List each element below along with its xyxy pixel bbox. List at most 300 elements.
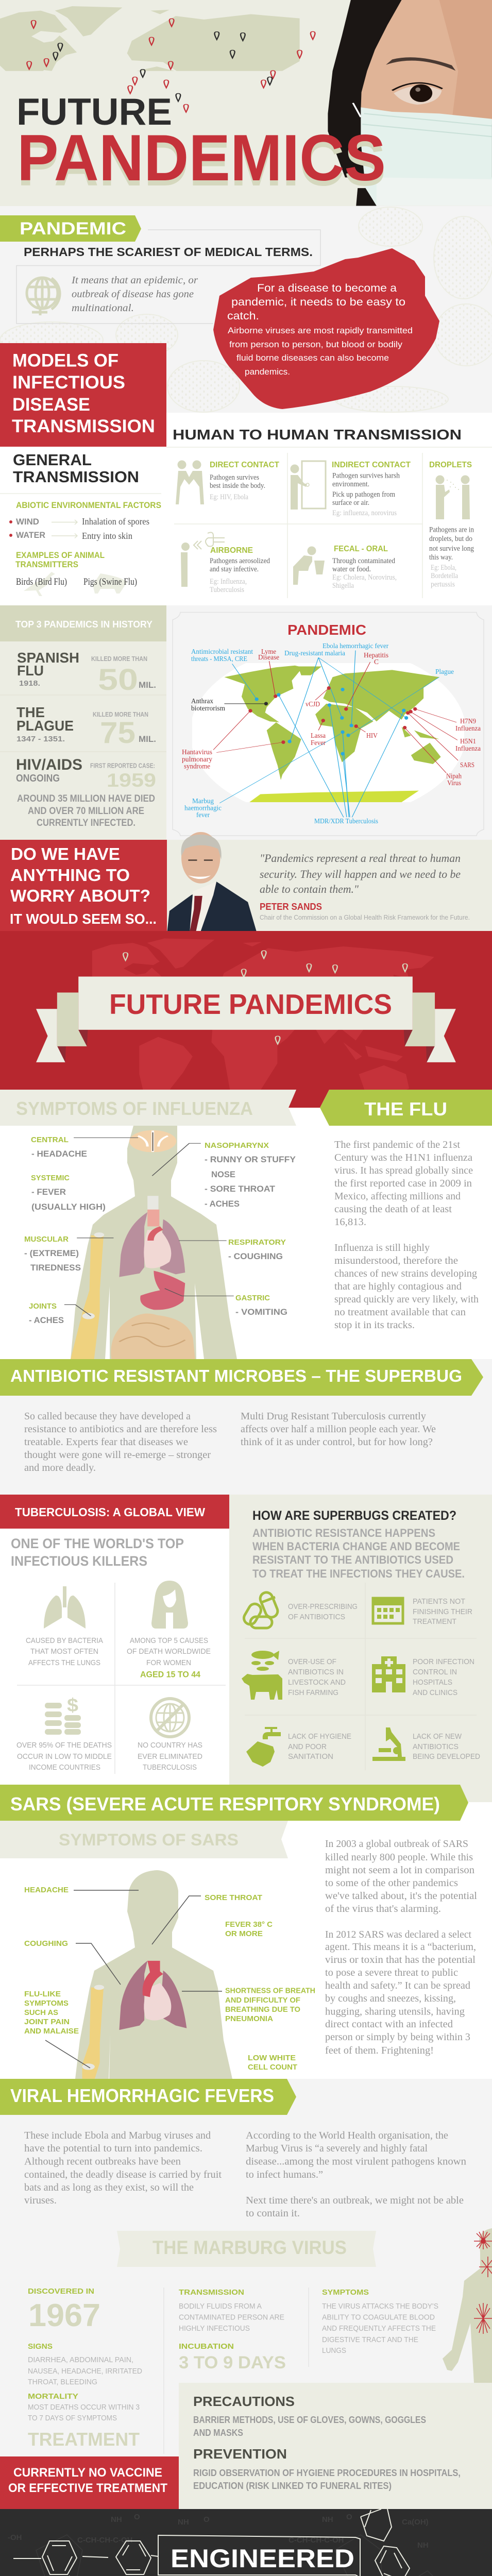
incubation: 3 TO 9 DAYS [179, 2353, 286, 2372]
arm bone [82, 1987, 104, 2079]
indirect contact: Pick up pathogen from [332, 490, 395, 499]
text: sars: person or simply by being within 3 [325, 2031, 470, 2043]
spanish flu: SPANISH [17, 650, 79, 666]
text: left column: and more deadly. [24, 1462, 96, 1473]
faint chemistry background: NH [322, 2515, 333, 2524]
droplets: droplets, but do [429, 535, 472, 543]
precautions and prevention [179, 2383, 492, 2509]
symptom labels: - RUNNY OR STUFFY [205, 1155, 296, 1164]
spanish flu: KILLED MORE THAN [91, 655, 147, 663]
text: the flu: 16,813. [334, 1216, 366, 1228]
signs [28, 2342, 142, 2386]
icon: microscope [372, 1727, 405, 1761]
map labels: blue: haemorrhagic [184, 805, 222, 812]
symptoms: SYMPTOMS [322, 2288, 369, 2297]
text: left column: have the potential to turn into pandemics. [24, 2143, 202, 2154]
precautions and prevention: AND MASKS [193, 2428, 243, 2438]
map labels: red: H5N1 [460, 738, 476, 745]
hiv/aids: FIRST REPORTED CASE: [90, 761, 155, 770]
stat: deaths in low income countries: OVER 95% OF THE DEATHS [16, 1741, 112, 1750]
icon: bird [24, 572, 55, 596]
abiotic environmental factors: WATER [16, 530, 45, 540]
callout: red blob [213, 248, 439, 409]
text: sars: we've talked about, it's the potential [325, 1890, 477, 1902]
callout: red blob: pandemic, it needs to be easy to [231, 296, 405, 308]
symptom labels: HEADACHE [24, 1886, 69, 1894]
text: the flu: no treatment available that can [334, 1307, 466, 1318]
cause: over-prescribing: OF ANTIBIOTICS [288, 1613, 345, 1621]
abiotic environmental factors: Inhalation of spores [82, 516, 149, 527]
text: the flu: causing the death of at least [334, 1204, 452, 1215]
airborne: Eg: Influenza, [210, 578, 247, 586]
map labels: blue: Marbug [192, 798, 214, 805]
indirect contact: INDIRECT CONTACT [332, 461, 411, 469]
symptom labels: NASOPHARYNX [205, 1141, 269, 1150]
text: the flu: spread quickly are very likely, with [334, 1294, 479, 1305]
text: left column: treatable. Experts fear that diseases we [24, 1436, 188, 1448]
symptom labels: TIREDNESS [30, 1263, 81, 1273]
map labels: red: Disease [258, 654, 279, 662]
red world map [92, 939, 434, 1090]
hiv/aids: 1959 [107, 770, 156, 791]
symptom labels: MUSCULAR [24, 1235, 69, 1244]
faint chemistry background: -OH [8, 2533, 22, 2542]
symptom labels: SHORTNESS OF BREATH [225, 1987, 315, 1995]
map labels: red: Nipah [446, 773, 462, 780]
callout: no vaccine: OR EFFECTIVE TREATMENT [8, 2481, 167, 2495]
abiotic environmental factors: ABIOTIC ENVIRONMENTAL FACTORS [16, 500, 161, 510]
droplets [429, 461, 474, 588]
red question block: DO WE HAVE [11, 844, 120, 863]
lungs [119, 1961, 186, 2030]
symptom labels [24, 1136, 296, 1325]
abiotic environmental factors: Entry into skin [82, 531, 132, 541]
precautions and prevention: PRECAUTIONS [193, 2394, 295, 2409]
transmission: HIGHLY INFECTIOUS [179, 2324, 250, 2333]
signs: DIARRHEA, ABDOMINAL PAIN, [28, 2355, 133, 2364]
spanish flu [17, 650, 156, 697]
icon: two people shaking hands [176, 461, 204, 504]
mortality: MORTALITY [28, 2392, 78, 2401]
panel: antibiotic resistant microbes [0, 1359, 492, 1495]
cause: poor infection control: CONTROL IN [413, 1668, 457, 1676]
symptom labels: JOINT PAIN [24, 2018, 70, 2026]
trachea [147, 1196, 159, 1210]
spanish flu: MIL. [139, 680, 156, 690]
connector lines [45, 1890, 222, 2068]
indirect contact: Eg: influenza, norovirus [332, 509, 397, 517]
map labels: red: pulmonary [182, 756, 212, 764]
map labels: red: Influenza [455, 725, 481, 733]
heading: models [0, 343, 166, 447]
symptoms [322, 2288, 438, 2355]
stomach [140, 1271, 185, 1310]
spanish flu: 1918. [19, 679, 40, 688]
panel: the marburg virus [0, 2228, 492, 2509]
incubation: INCUBATION [179, 2342, 234, 2351]
stat: deaths in low income countries: $ [67, 1694, 78, 1716]
droplets: Bordetella [431, 572, 458, 580]
banner: symptoms of influenza: SYMPTOMS OF INFLUENZA [16, 1098, 253, 1119]
panel: pandemic definition [0, 206, 492, 413]
cause: lack of new antibiotics: ANTIBIOTICS [413, 1742, 459, 1751]
text: left column: bats and as long as they exist, so will the [24, 2182, 194, 2193]
banner [0, 1785, 468, 1821]
banner [0, 1359, 483, 1396]
subheading: ONE OF THE WORLD'S TOP [11, 1536, 184, 1551]
map labels: black [191, 698, 225, 713]
heart [144, 1983, 171, 2021]
transmission: BODILY FLUIDS FROM A [179, 2302, 262, 2311]
stat: no country eliminated: EVER ELIMINATED [138, 1752, 202, 1761]
map labels: red: Lassa [311, 732, 326, 740]
title: PANDEMICS [17, 121, 386, 194]
subheading [11, 1536, 184, 1569]
hiv/aids [16, 756, 156, 828]
cause: poor infection control [372, 1656, 474, 1697]
indirect contact: Pathogen survives harsh [332, 472, 400, 480]
faint chemistry background: C-CH-CH-C-OH [77, 2536, 132, 2545]
hiv/aids: AROUND 35 MILLION HAVE DIED [17, 793, 155, 804]
banner: symptoms of influenza [0, 1090, 296, 1126]
cause: poor infection control: HOSPITALS [413, 1678, 452, 1687]
heading: human to human: HUMAN TO HUMAN TRANSMISSION [173, 427, 462, 443]
quote [260, 852, 461, 895]
text: right column: Marbug Virus is “a severely and highly fatal [246, 2143, 428, 2154]
panel: pandemic world map [166, 605, 492, 840]
banner: pandemic: PANDEMIC [20, 219, 126, 239]
airborne: and stay infective. [210, 565, 259, 573]
stat: no country eliminated: TUBERCULOSIS [143, 1763, 197, 1772]
icon: globe [27, 278, 60, 315]
cause: over-prescribing: OVER-PRESCRIBING [288, 1602, 358, 1611]
map labels: red: Hantavirus [182, 749, 212, 756]
discovered: 1967 [28, 2298, 100, 2333]
banner: ANTIBIOTIC RESISTANT MICROBES – THE SUPERBUG [10, 1366, 462, 1385]
cause: lack of new antibiotics: LACK OF NEW [413, 1732, 462, 1741]
header [0, 1495, 229, 1529]
molecule drawing [13, 2509, 410, 2576]
map labels: blue: Drug-resistant malaria [284, 650, 346, 657]
text: sars: to pose a severe threat to public [325, 1967, 458, 1978]
heart [144, 1230, 171, 1268]
cause: over-use in farming: FISH FARMING [288, 1688, 338, 1697]
attribution [260, 902, 470, 921]
abiotic environmental factors [9, 500, 161, 541]
text: right column: affects over half a million people each year. We [241, 1423, 436, 1435]
map labels: red: HIV [366, 732, 378, 740]
map labels: red: Influenza [455, 745, 481, 753]
faint chemistry background: O [346, 2513, 352, 2521]
abiotic environmental factors: WIND [16, 517, 39, 527]
faint chemistry background: O [203, 2515, 210, 2524]
text: right column: Multi Drug Resistant Tuberculosis currently [241, 1411, 426, 1422]
title: PANDEMICS [17, 126, 386, 199]
panel: models of infectious disease transmission [0, 343, 492, 605]
text: sars [325, 1838, 477, 2056]
mortality: MOST DEATHS OCCUR WITHIN 3 [28, 2403, 140, 2412]
mortality: TO 7 DAYS OF SYMPTOMS [28, 2414, 117, 2422]
attribution: Chair of the Commission on a Global Health Risk Framework for the Future. [260, 913, 470, 921]
symptom labels: COUGHING [24, 1939, 68, 1948]
ribbon heading: THE MARBURG VIRUS [152, 2237, 347, 2258]
text: left column [24, 1411, 217, 1473]
heading: models: INFECTIOUS [12, 372, 125, 393]
intro [252, 1527, 465, 1580]
fecal-oral: water or food. [332, 565, 371, 573]
subheading: INFECTIOUS KILLERS [11, 1553, 147, 1569]
hero map pins [27, 19, 315, 112]
fecal-oral: Shigella [332, 582, 354, 590]
faint chemistry background: C-CH-CH-C-OH [289, 2536, 344, 2545]
panel: engineered [0, 2509, 492, 2576]
text: left column [24, 2130, 222, 2206]
panel: viral hemorrhagic fevers [0, 2079, 492, 2509]
photo: Peter Sands [167, 832, 257, 931]
fecal-oral [293, 545, 397, 590]
text: sars: In 2012 SARS was declared a select [325, 1929, 471, 1940]
direct contact: Pathogen survives [210, 473, 259, 482]
heading: models: DISEASE [12, 395, 90, 415]
quote: able to contain them." [260, 883, 359, 895]
text: the flu: Century was the H1N1 influenza [334, 1152, 472, 1163]
symptom labels: SYSTEMIC [31, 1174, 70, 1182]
hiv/aids: HIV/AIDS [16, 756, 82, 773]
symptom labels: CELL COUNT [248, 2063, 297, 2072]
faint chemistry background: Ca(OH) [402, 2518, 429, 2527]
symptom labels: JOINTS [29, 1302, 57, 1311]
banner [0, 2079, 296, 2115]
text: sars: virus or toxin that has the potential [325, 1954, 476, 1965]
panel: how are superbugs created [229, 1495, 492, 1802]
map labels: black: Anthrax [191, 698, 213, 705]
text: right column [241, 1411, 436, 1448]
symptom labels: - ACHES [29, 1315, 64, 1325]
stat: bacteria affects lungs: AFFECTS THE LUNGS [28, 1658, 100, 1667]
text: right column: think of it as under control, but for how long? [241, 1436, 433, 1448]
map labels: red: Lyme [261, 648, 276, 656]
text: left column: So called because they have developed a [24, 1411, 191, 1422]
cause: patients not finishing [373, 1597, 472, 1626]
cause: lack of new antibiotics [372, 1727, 480, 1761]
banner: VIRAL HEMORRHAGIC FEVERS [10, 2085, 274, 2106]
map labels: red: SARS [460, 761, 474, 769]
red question block: WORRY ABOUT? [10, 886, 150, 905]
panel: top 3 pandemics in history [0, 605, 166, 840]
examples of animal transmitters: EXAMPLES OF ANIMAL [16, 550, 105, 560]
title: FUTURE [16, 91, 172, 133]
banner: symptoms of sars [0, 1821, 288, 1858]
symptoms: LUNGS [322, 2346, 346, 2355]
text: left column: contained, the deadly disease is carried by fruit [24, 2169, 222, 2180]
map labels: red: vCJD [306, 701, 320, 708]
callout: red blob: catch. [227, 310, 259, 322]
subtitle: PERHAPS THE SCARIEST OF MEDICAL TERMS. [24, 245, 313, 259]
hiv/aids: AND OVER 70 MILLION ARE [28, 806, 144, 817]
cause: patients not finishing: FINISHING THEIR [413, 1607, 472, 1616]
map labels: red: Fever [311, 739, 326, 747]
text: the flu: the first reported case in 2009 in [334, 1178, 472, 1189]
precautions and prevention: BARRIER METHODS, USE OF GLOVES, GOWNS, GOGGLES [193, 2415, 426, 2425]
cause: lack of hygiene: LACK OF HYGIENE [288, 1732, 351, 1741]
icon: coins [45, 1703, 81, 1735]
examples of animal transmitters: TRANSMITTERS [15, 560, 78, 569]
indirect contact: surface or air. [332, 499, 369, 507]
the plague: PLAGUE [16, 718, 74, 734]
background blobs [0, 207, 492, 412]
header [0, 605, 166, 641]
droplets: not survive long [429, 545, 474, 553]
cause: patients not finishing: PATIENTS NOT [413, 1597, 465, 1606]
panel: tuberculosis global view [0, 1495, 229, 1774]
faint chemistry background: NH [111, 2515, 122, 2524]
mortality [28, 2392, 140, 2422]
symptom labels: FEVER 38° C [225, 1920, 273, 1929]
discovered: DISCOVERED IN [28, 2287, 94, 2296]
cause: over-use in farming [242, 1651, 346, 1700]
callout: red blob: fluid borne diseases can also become [236, 353, 389, 363]
symptom labels: AND MALAISE [24, 2027, 79, 2036]
pins [123, 951, 408, 1044]
callout: red blob: Airborne viruses are most rapidly transmitted [228, 326, 413, 335]
text: sars: agent. This means it is a “bacterium, [325, 1941, 476, 1953]
incubation [179, 2342, 286, 2372]
airborne: AIRBORNE [210, 546, 253, 555]
heading: general transmission: GENERAL [13, 451, 92, 469]
droplets: DROPLETS [429, 461, 472, 469]
text: sars: killed nearly 800 people. While this [325, 1852, 473, 1863]
stat: deaths in low income countries: OCCUR IN LOW TO MIDDLE [17, 1752, 112, 1761]
icon: person at door [291, 461, 326, 510]
red question block [0, 840, 167, 931]
precautions and prevention: PREVENTION [193, 2446, 287, 2462]
cause: over-prescribing [242, 1590, 358, 1628]
body silhouette with lungs [75, 1870, 232, 2079]
text: sars: might not seem a lot in comparison [325, 1865, 474, 1876]
stat: causes of death for women: AGED 15 TO 44 [140, 1669, 201, 1680]
map labels: red: C [374, 658, 379, 666]
transmission: TRANSMISSION [179, 2288, 244, 2297]
text: the flu [334, 1139, 479, 1331]
symptom labels: CENTRAL [31, 1136, 69, 1144]
treatment heading: TREATMENT [28, 2429, 140, 2450]
signs: THROAT, BLEEDING [28, 2378, 97, 2386]
direct contact: best inside the body. [210, 482, 265, 490]
transmission: CONTAMINATED PERSON ARE [179, 2313, 284, 2321]
banner: pandemic [0, 215, 141, 242]
icon: person and cup [293, 546, 325, 585]
heading: models: TRANSMISSION [12, 416, 155, 436]
panel: future pandemics banner [0, 931, 492, 1090]
signs: NAUSEA, HEADACHE, IRRITATED [28, 2367, 142, 2376]
symptom labels: BREATHING DUE TO [225, 2005, 300, 2014]
heading: PANDEMIC [287, 622, 366, 638]
map labels: blue: MDR/XDR Tuberculosis [314, 818, 378, 825]
stat: bacteria affects lungs: CAUSED BY BACTERIA [26, 1636, 103, 1645]
symptom connector lines [64, 1138, 234, 1316]
panel: sars [0, 1785, 477, 2079]
text: sars: In 2003 a global outbreak of SARS [325, 1838, 468, 1850]
map labels: red [182, 648, 481, 787]
text: the flu: stop it in its tracks. [334, 1319, 415, 1331]
hero panel [0, 0, 492, 206]
cause: lack of hygiene [246, 1727, 351, 1767]
arm bone [71, 1235, 104, 1359]
icon: globe with strike [151, 1699, 189, 1737]
symptom labels: RESPIRATORY [228, 1238, 286, 1247]
callout: no vaccine: CURRENTLY NO VACCINE [13, 2466, 162, 2480]
map labels: blue: threats - MRSA, CRE [191, 655, 247, 663]
brain [129, 1130, 176, 1152]
map backdrop [192, 663, 464, 802]
banner: the flu [320, 1090, 492, 1126]
text: the flu: virus. It has spread globally since [334, 1165, 473, 1176]
quote: "Pandemics represent a real threat to human [260, 852, 461, 865]
symptom labels: SORE THROAT [205, 1893, 262, 1902]
hiv/aids: CURRENTLY INFECTED. [37, 818, 135, 828]
cause: patients not finishing: TREATMENT [413, 1617, 456, 1626]
cause: poor infection control: POOR INFECTION [413, 1657, 474, 1666]
direct contact [176, 461, 279, 504]
icon: tap and hand [246, 1727, 281, 1767]
text: sars: of the virus that's alarming. [325, 1903, 441, 1914]
symptom labels: LOW WHITE [248, 2054, 296, 2062]
panel: do we have anything to worry about [0, 832, 492, 931]
symptom labels: NOSE [211, 1170, 235, 1179]
icon: calendar [373, 1598, 403, 1623]
stat: bacteria affects lungs: THAT MOST OFTEN [30, 1647, 98, 1656]
fecal-oral: FECAL - ORAL [334, 545, 388, 553]
text: right column: disease...among the most virulent pathogens known [246, 2156, 466, 2167]
faint chemistry background: O [134, 2513, 140, 2521]
heading: general transmission [13, 451, 139, 486]
text: left column: These include Ebola and Marbug viruses and [24, 2130, 211, 2141]
map labels: blue: Plague [435, 668, 454, 676]
map labels: red: H7N9 [460, 718, 476, 725]
symptom labels: - VOMITING [235, 1307, 287, 1317]
callout: red blob: pandemics. [245, 367, 290, 377]
text: sars: to some of the other pandemics [325, 1877, 458, 1889]
text: sars: direct contact with an infected [325, 2019, 453, 2030]
the plague: MIL. [139, 734, 156, 744]
fecal-oral: Through contaminated [332, 557, 395, 565]
text: definition: multinational. [72, 302, 134, 314]
the plague: 75 [100, 716, 135, 750]
text: sars: hugging, sharing utensils, having [325, 2006, 465, 2018]
symptom labels [24, 1886, 315, 2072]
intestines [111, 1314, 195, 1359]
icon: lungs [44, 1586, 86, 1629]
icon: droplets between people [436, 475, 470, 519]
direct contact: Eg: HIV, Ebola [210, 493, 248, 501]
text: the flu: The first pandemic of the 21st [334, 1139, 460, 1150]
text: definition: outbreak of disease has gone [72, 289, 194, 300]
symptom labels: - HEADACHE [31, 1149, 87, 1159]
faint chemistry background: NH [417, 2541, 429, 2550]
map labels: red: Virus [447, 779, 461, 787]
body figure with bleeding bursts [443, 2228, 492, 2383]
indirect contact [291, 461, 411, 517]
precautions and prevention: RIGID OBSERVATION OF HYGIENE PROCEDURES IN HOSPITALS, [193, 2468, 461, 2478]
the plague: KILLED MORE THAN [93, 710, 148, 718]
text: right column: to infect humans.” [246, 2169, 323, 2180]
map labels: red: Hepatitis [364, 652, 388, 659]
red question block: ANYTHING TO [10, 866, 130, 885]
symptom labels: - (EXTREME) [24, 1248, 79, 1258]
icon: pig [93, 573, 127, 594]
header: TOP 3 PANDEMICS IN HISTORY [15, 619, 152, 630]
text: left column: resistance to antibiotics and are therefore less [24, 1423, 217, 1435]
